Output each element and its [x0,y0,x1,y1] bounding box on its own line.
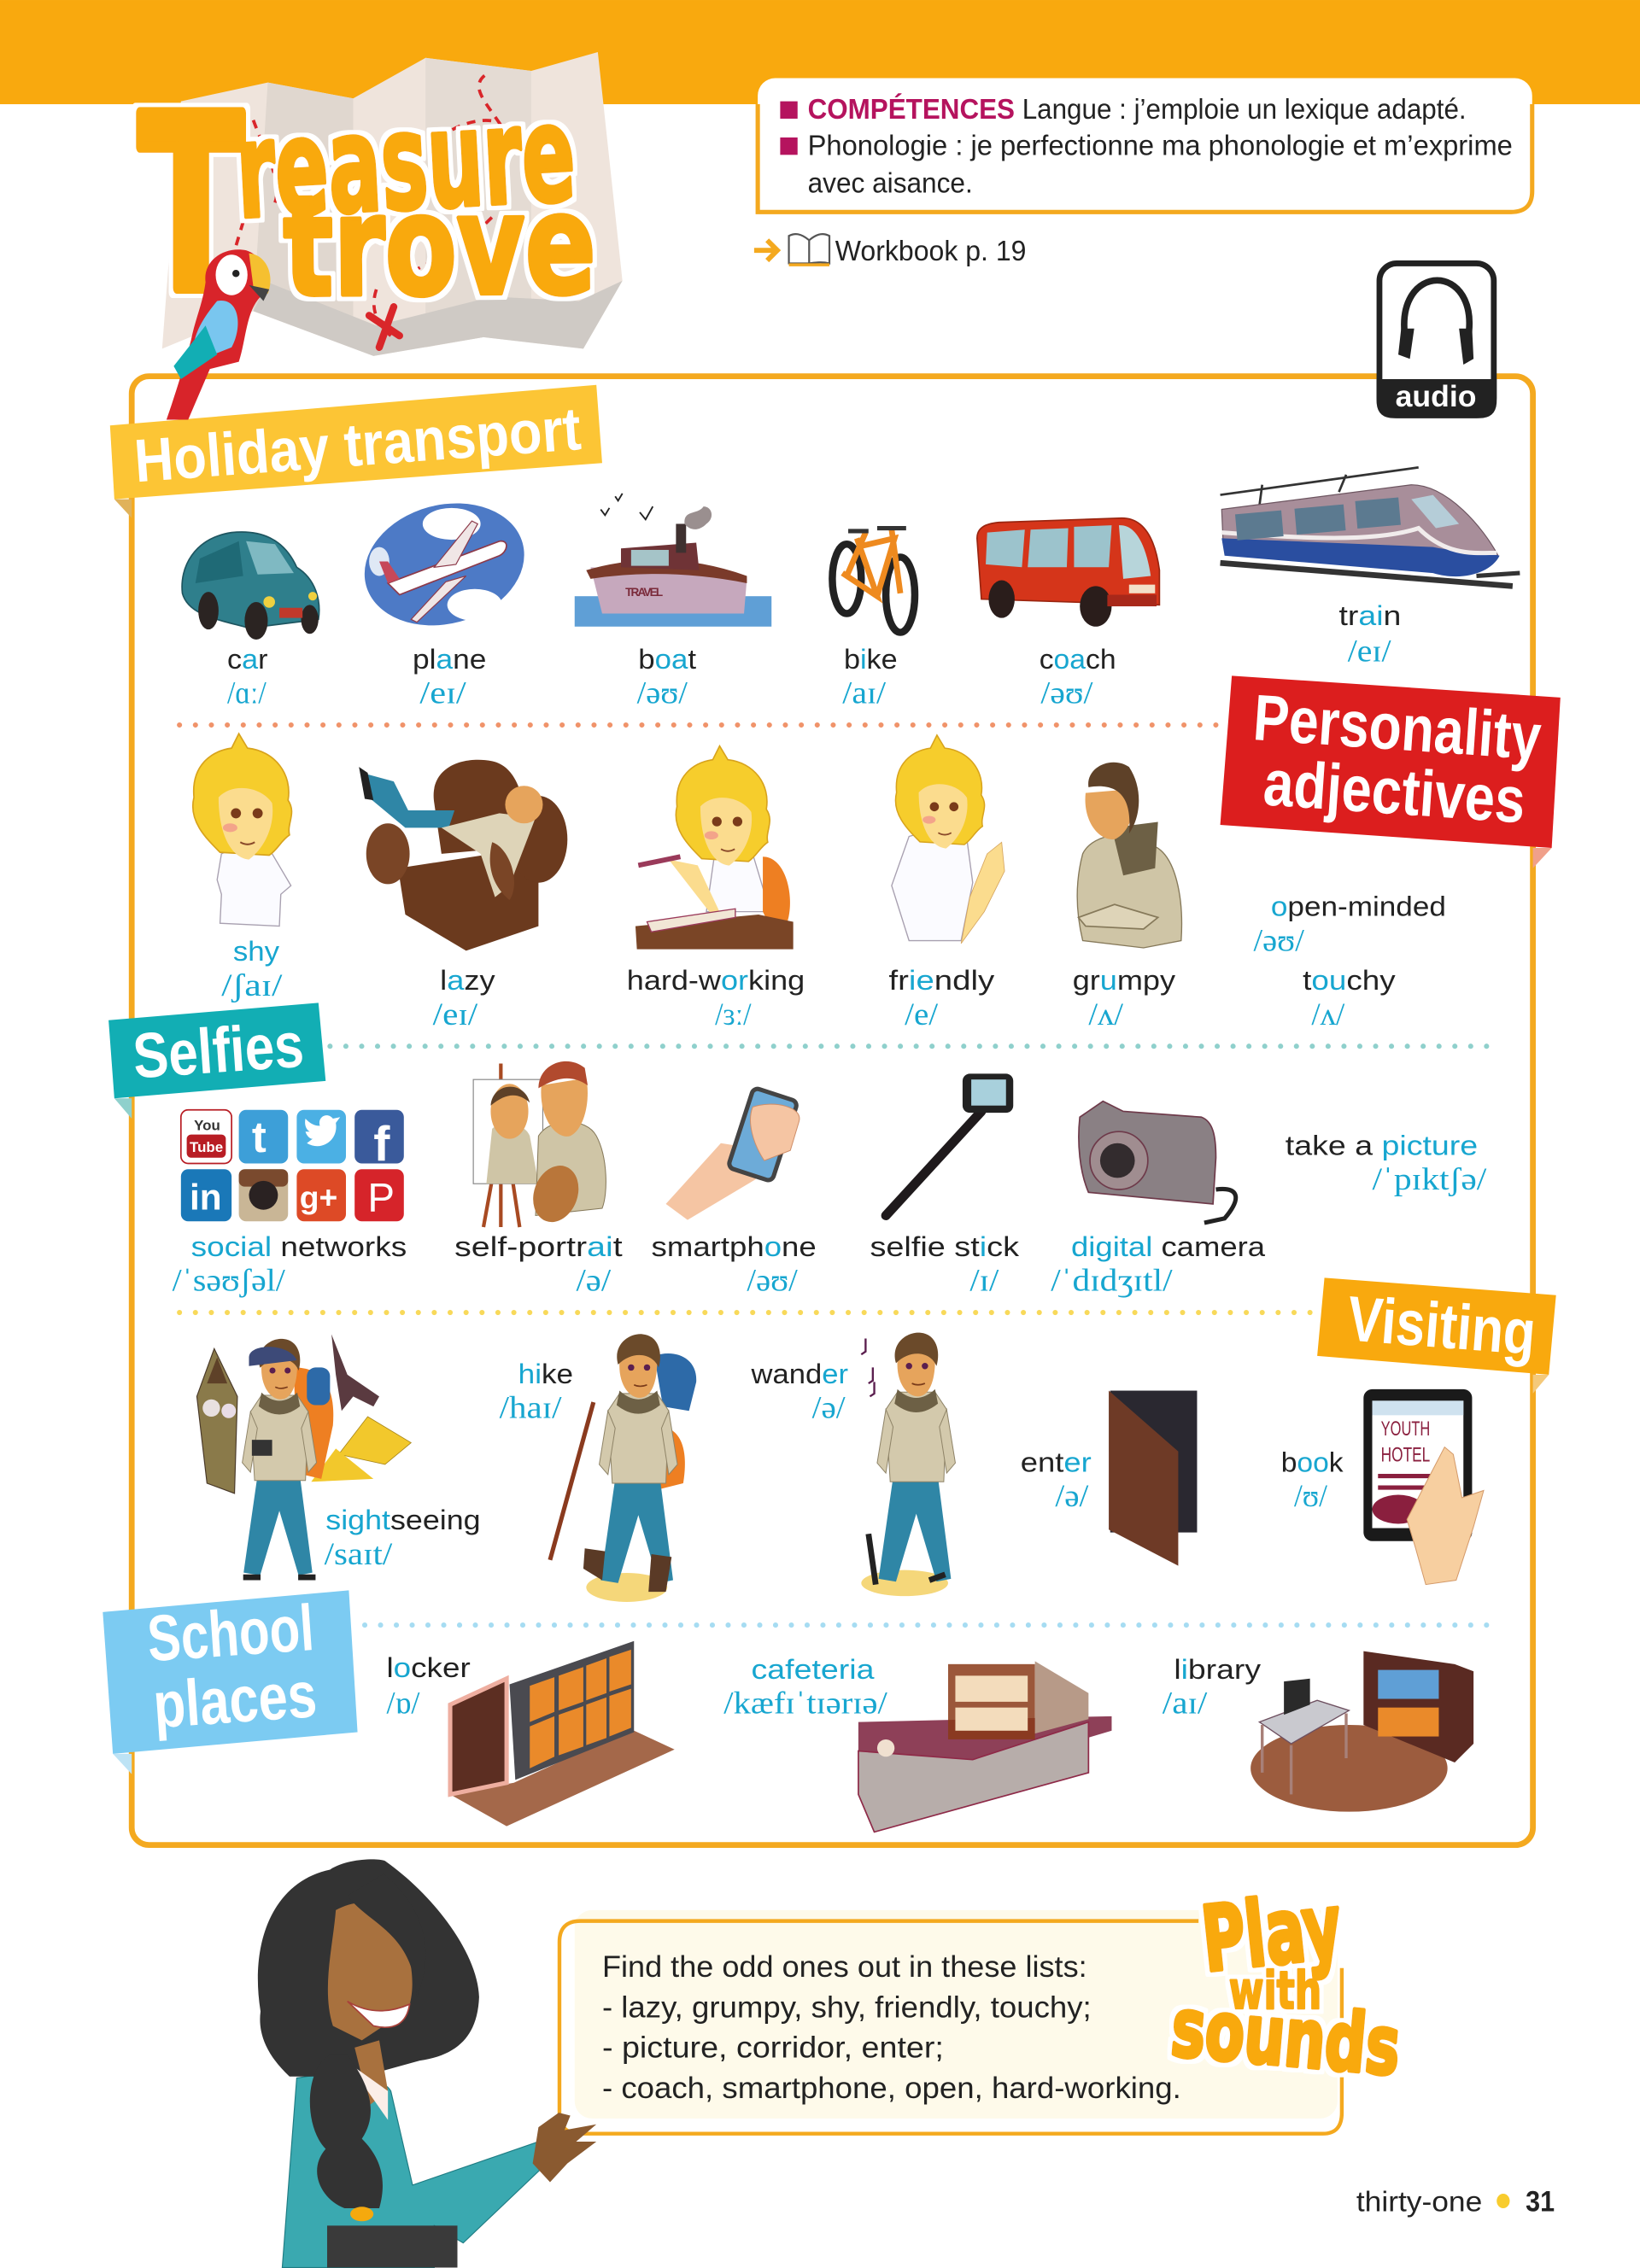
banner: Selfies [108,1002,325,1119]
callout: competences: COMPÉTENCES Langue : j’emploie un lexique adapté. [808,93,1467,126]
icon: social network tiles [181,1110,404,1221]
banner: School places: places [151,1658,319,1742]
label: hard-working: /ɜː/ [715,997,752,1032]
icon: train [1221,467,1520,586]
label: touchy: /ʌ/ [1311,997,1345,1032]
icon: shy boy [193,734,291,926]
label: take a picture [1286,1130,1487,1197]
label: smartphone: smartph one [652,1231,817,1262]
label: sightseeing: /saɪt/ [325,1537,393,1572]
label: bike: bike [844,644,898,675]
label: cafeteria: /kæfɪˈtɪərɪə/ [723,1686,888,1721]
label: self-portrait: self-portr ai t [454,1231,623,1262]
icon: self-portrait [473,1061,606,1229]
label: boat: boat [638,644,696,675]
banner: School places: School [145,1592,316,1675]
label: grumpy: /ʌ/ [1088,997,1124,1032]
callout: competences: avec aisance. [808,167,973,199]
banner: Personality adjectives: Personality [1251,681,1543,774]
icon: social network tiles: You [194,1118,220,1134]
icon: coach [977,518,1159,627]
label: hike: hike [518,1359,573,1389]
icon: bike [832,529,915,633]
icon: boat [575,494,771,627]
label: social networks: /ˈsəʊʃəl/ [173,1264,286,1299]
label: friendly: /e/ [905,997,939,1032]
banner: Visiting [1317,1277,1556,1394]
callout: Play with sounds activity: Find the odd ones out in these lists: [602,1949,1087,1984]
label: wander: wand er [750,1359,848,1389]
icon: hiker [550,1334,696,1602]
label: library: library [1174,1654,1262,1685]
label: lazy: /eɪ/ [433,997,478,1032]
label: enter: /ə/ [1055,1479,1089,1514]
label: library [1163,1654,1262,1721]
label: open-minded: /əʊ/ [1254,923,1305,958]
icon: library [1250,1651,1473,1812]
label: train [1339,600,1401,669]
label: library: /aɪ/ [1163,1686,1208,1721]
banner: Visiting: Visiting [1345,1283,1538,1368]
icon: hard-working boy [636,746,794,950]
label: touchy: tou chy [1303,965,1397,996]
icon: social network tiles: f [373,1117,390,1172]
icon: tablet and hand: HOTEL [1381,1445,1430,1467]
icon: audio: audio [1396,379,1477,413]
label: enter: ent er [1021,1447,1092,1477]
label: hike [500,1359,573,1426]
label: lazy: lazy [440,965,496,996]
label: coach [1040,644,1116,711]
label: cafeteria [723,1654,888,1721]
label: social networks: social networks [191,1231,407,1262]
label: hard-working: hard-w orking [627,965,805,996]
label: enter [1021,1447,1092,1514]
icon: social network tiles: Tube [190,1139,223,1155]
icon: wandering tourist [861,1333,955,1596]
illustration: treasure map [162,52,623,356]
label: wander [750,1359,848,1426]
callout: Play with sounds activity: - coach, smartphone, open, hard-working. [602,2071,1181,2105]
icon: plane [351,486,538,643]
label: self-portrait: /ə/ [576,1264,612,1299]
page number [1356,2185,1555,2218]
illustration: girl [258,1859,554,2267]
title: Treasure trove: trove [283,165,597,329]
icon: car [182,532,319,640]
icon: sightseeing tourist with landmarks [196,1334,411,1581]
label: selfie stick: selfie st ick [870,1231,1020,1262]
banner: Personality adjectives: adjectives [1262,746,1527,838]
label: open-minded [1254,891,1446,958]
label: hard-working [627,965,805,1032]
label: coach: /əʊ/ [1040,676,1093,711]
label: touchy [1303,965,1397,1032]
label: wander: /ə/ [812,1391,846,1426]
icon: audio [1377,263,1496,418]
icon: social network tiles: t [252,1113,266,1161]
label: open-minded: open-minded [1271,891,1446,922]
panel: main vocabulary [102,377,1561,1845]
label: book: book [1281,1447,1344,1477]
label: selfie stick: /ɪ/ [969,1264,999,1299]
icon: girl's hand [533,2113,596,2182]
heading: Play with sounds [1168,1873,1404,2095]
title: Treasure trove: T [139,66,244,345]
top orange band [0,0,1640,104]
label: car: car [227,644,268,675]
label: bike [842,644,898,711]
icon: digital camera [1079,1102,1236,1223]
icon: friendly boy [892,735,1004,944]
callout: Play with sounds activity [559,1910,1342,2134]
label: locker: /ɒ/ [386,1686,420,1721]
icon: grumpy boy [1077,763,1181,948]
label: book: /ʊ/ [1294,1479,1328,1514]
label: sightseeing [325,1505,481,1572]
icon: tablet and hand [1363,1389,1484,1585]
label: coach: coach [1040,644,1116,675]
icon: social network tiles: P [367,1175,395,1220]
label: plane: plane [413,644,486,675]
icon: door [1109,1391,1197,1566]
banner: Selfies: Selfies [131,1009,306,1091]
callout: competences [758,79,1532,213]
label: self-portrait [454,1231,623,1299]
label: smartphone: /əʊ/ [747,1264,798,1299]
label: plane [413,644,486,711]
label: boat: /əʊ/ [637,676,688,711]
label: boat [637,644,696,711]
banner: Personality adjectives [1221,675,1561,868]
label: digital camera: digital camera [1071,1231,1265,1262]
label: locker [386,1652,471,1721]
icon: parrot [167,249,271,419]
label: hike: /haɪ/ [500,1391,562,1426]
icon: lazy boy in armchair [359,760,567,950]
banner: School places [102,1590,358,1774]
label: friendly [888,965,995,1032]
icon: lockers [450,1641,675,1827]
icon: smartphone in hand [666,1087,800,1220]
label: social networks [173,1231,407,1299]
title: Treasure trove [139,66,597,345]
label: grumpy [1073,965,1176,1032]
heading: Play with sounds: with [1229,1961,1321,2021]
callout: Play with sounds activity: - picture, corridor, enter; [602,2031,944,2065]
label: digital camera: /ˈdɪdʒɪtl/ [1051,1264,1173,1299]
callout: Play with sounds activity: - lazy, grumpy, shy, friendly, touchy; [602,1990,1092,2024]
banner: Holiday transport: Holiday transport [132,395,583,495]
workbook reference: Workbook p. 19 [835,236,1026,267]
label: grumpy: grumpy [1073,965,1176,996]
label: take a picture: /ˈpɪktʃə/ [1372,1162,1487,1197]
label: shy: /ʃaɪ/ [221,968,283,1003]
page number: 31 [1526,2185,1555,2218]
label: car: /ɑː/ [227,676,266,711]
icon: boat: TRAVEL [625,586,663,599]
label: smartphone [652,1231,817,1299]
label: shy [221,936,283,1003]
icon: tablet and hand: YOUTH [1381,1418,1430,1441]
title: Treasure trove: reasure [232,76,579,248]
heading: Play with sounds: Play [1197,1873,1346,1992]
label: book [1281,1447,1344,1514]
label: car [227,644,268,711]
label: locker: locker [386,1652,471,1683]
label: train: /eɪ/ [1348,634,1391,669]
workbook reference [754,234,1026,267]
icon: selfie stick [886,1073,1013,1215]
callout: competences: Phonologie : je perfectionne ma phonologie et m’exprime [808,130,1513,161]
label: take a picture: take a picture [1286,1130,1478,1160]
icon: social network tiles: g+ [300,1179,337,1215]
label: friendly: frie ndly [888,965,995,996]
icon: cafeteria [858,1661,1111,1832]
icon: social network tiles: in [190,1178,222,1218]
label: cafeteria: cafeteria [752,1654,875,1685]
label: lazy [433,965,496,1032]
label: train: train [1339,600,1401,631]
label: bike: /aɪ/ [842,676,887,711]
label: shy: shy [233,936,280,967]
label: selfie stick [870,1231,1020,1299]
label: sightseeing: sight seeing [325,1505,481,1535]
heading: Play with sounds: sounds [1168,1981,1404,2095]
page number: thirty-one [1356,2186,1482,2218]
label: digital camera [1051,1231,1265,1299]
label: plane: /eɪ/ [419,676,466,711]
